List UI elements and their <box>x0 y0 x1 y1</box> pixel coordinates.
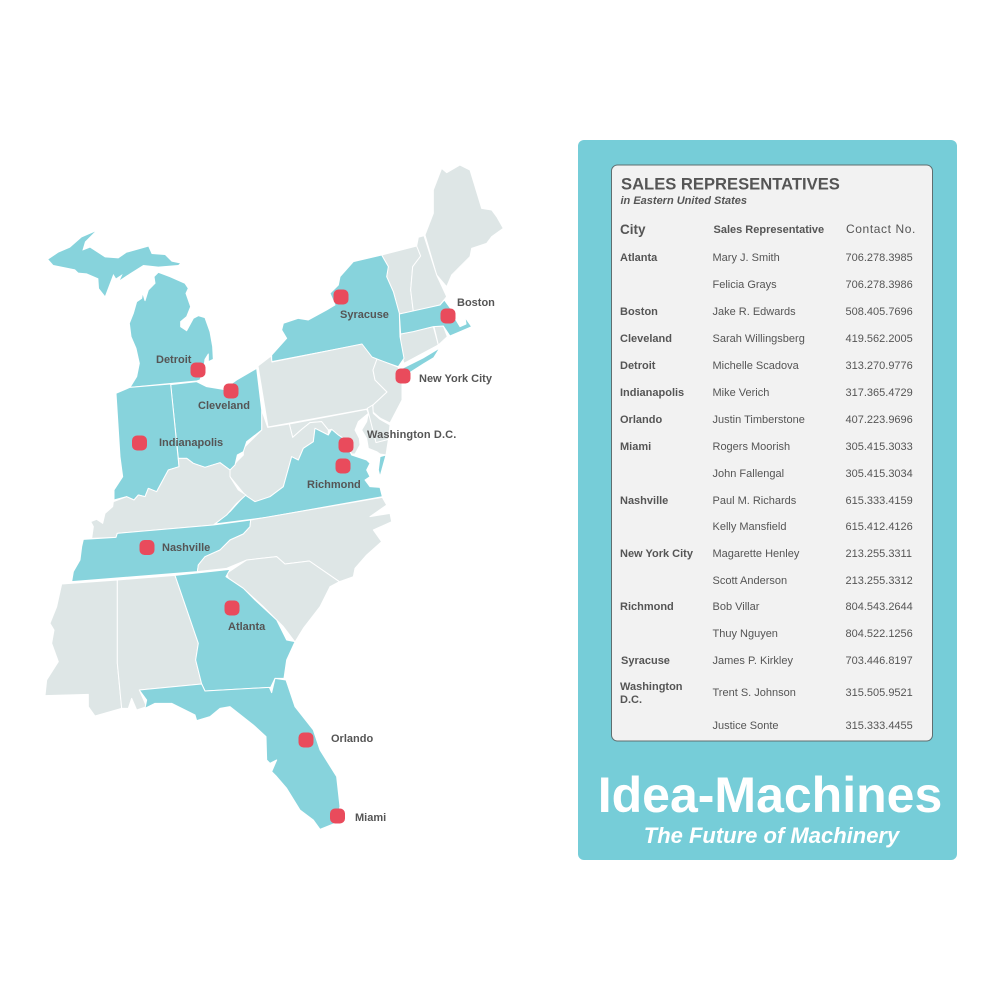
marker: Orlando: Orlando <box>331 733 373 745</box>
row: Syracuse: James P. Kirkley <box>712 655 793 667</box>
row: Nashville: Nashville <box>620 495 668 507</box>
state: South Carolina <box>227 557 339 642</box>
row: Detroit: Michelle Scadova <box>712 360 800 372</box>
row: Atlanta 2 <box>712 279 913 291</box>
tagline: The Future of Machinery <box>644 823 901 848</box>
row: Atlanta: 706.278.3985 <box>846 252 913 264</box>
row: New York City 2: Scott Anderson <box>712 575 787 587</box>
state: Virginia <box>215 428 382 524</box>
row: Washington D.C.: D.C. <box>620 694 642 706</box>
row: Boston: 508.405.7696 <box>846 306 913 318</box>
marker: Miami <box>330 808 386 824</box>
row: Richmond 2 <box>712 628 913 640</box>
marker: Richmond: Richmond <box>307 479 361 491</box>
marker: Indianapolis: Indianapolis <box>159 437 223 449</box>
state: Mississippi <box>45 580 122 716</box>
state: North Carolina <box>197 497 392 582</box>
row: Orlando: Justin Timberstone <box>712 414 805 426</box>
state: New Hampshire <box>411 236 447 312</box>
row: Orlando <box>620 414 913 426</box>
row: Nashville 2 <box>712 521 913 533</box>
row: Indianapolis: Indianapolis <box>620 387 684 399</box>
row: Washington D.C.: 315.505.9521 <box>846 687 913 699</box>
row: Syracuse: Syracuse <box>621 655 670 667</box>
row: Atlanta: Mary J. Smith <box>712 252 780 264</box>
row: Detroit: Detroit <box>620 360 656 372</box>
map: eastern United States <box>45 165 503 829</box>
row: New York City 2 <box>712 575 913 587</box>
state: Alabama <box>117 575 202 710</box>
state: New Jersey <box>373 359 402 423</box>
state: Maine <box>425 165 503 287</box>
row: Orlando: Orlando <box>620 414 662 426</box>
state: Maryland <box>289 409 368 454</box>
row: Nashville: 615.333.4159 <box>846 495 913 507</box>
row: Atlanta <box>620 252 913 264</box>
marker: Richmond <box>307 458 361 491</box>
marker: Atlanta: Atlanta <box>228 621 266 633</box>
row: Richmond 2: 804.522.1256 <box>846 628 913 640</box>
row: Miami: Miami <box>620 441 651 453</box>
row: Atlanta 2: Felicia Grays <box>712 279 777 291</box>
marker: Atlanta <box>224 600 266 633</box>
row: Washington D.C. 2: 315.333.4455 <box>846 720 913 732</box>
state: Michigan upper peninsula <box>48 232 180 296</box>
Long Island <box>395 349 438 382</box>
table rows <box>620 252 913 732</box>
state: Massachusetts <box>399 300 472 336</box>
row: Atlanta: Atlanta <box>620 252 658 264</box>
marker: Nashville: Nashville <box>162 542 210 554</box>
state: Connecticut <box>400 327 438 363</box>
panel: sales representatives <box>578 140 957 860</box>
row: Boston <box>620 306 913 318</box>
row: New York City: 213.255.3311 <box>846 548 912 560</box>
table card <box>612 165 932 741</box>
row: Orlando: 407.223.9696 <box>846 414 913 426</box>
marker: Detroit <box>156 354 206 378</box>
row: Washington D.C. <box>620 681 913 706</box>
row: Cleveland: Cleveland <box>620 333 672 345</box>
column headers: City <box>620 222 646 237</box>
state: West Virginia <box>230 410 328 502</box>
state: Ohio <box>171 368 262 470</box>
row: Washington D.C. 2 <box>712 720 913 732</box>
row: Miami 2: John Fallengal <box>712 468 784 480</box>
state: Rhode Island <box>434 326 447 345</box>
marker: Orlando <box>298 732 373 748</box>
row: Nashville 2: 615.412.4126 <box>846 521 913 533</box>
column headers: Contact No. <box>846 222 916 236</box>
row: Miami <box>620 441 913 453</box>
marker: Cleveland <box>198 384 250 412</box>
row: Cleveland <box>620 333 913 345</box>
row: Washington D.C.: Washington <box>620 681 683 693</box>
marker: Indianapolis <box>132 436 223 450</box>
row: New York City <box>620 548 912 560</box>
marker: Washington D.C. <box>338 429 456 452</box>
row: Detroit: 313.270.9776 <box>846 360 913 372</box>
row: Syracuse <box>621 655 913 667</box>
row: Atlanta 2: 706.278.3986 <box>846 279 913 291</box>
row: Miami 2 <box>712 468 913 480</box>
marker: New York City <box>396 368 493 385</box>
row: Syracuse: 703.446.8197 <box>846 655 913 667</box>
marker: Boston: Boston <box>457 297 495 309</box>
row: Washington D.C. 2: Justice Sonte <box>712 720 779 732</box>
row: New York City 2: 213.255.3312 <box>846 575 913 587</box>
row: Cleveland: Sarah Willingsberg <box>712 333 805 345</box>
row: Richmond: 804.543.2644 <box>846 601 913 613</box>
table heading: SALES REPRESENTATIVES <box>621 174 840 194</box>
row: Cleveland: 419.562.2005 <box>846 333 913 345</box>
state: Tennessee <box>72 520 251 582</box>
row: Indianapolis: Mike Verich <box>712 387 769 399</box>
company name: Idea-Machines <box>598 767 942 823</box>
marker: Detroit: Detroit <box>156 354 192 366</box>
row: Richmond: Richmond <box>620 601 674 613</box>
row: Nashville: Paul M. Richards <box>712 495 797 507</box>
marker: Syracuse: Syracuse <box>340 309 389 321</box>
row: Richmond 2: Thuy Nguyen <box>712 628 778 640</box>
row: Detroit <box>620 360 913 372</box>
marker: Boston <box>440 297 495 324</box>
row: Miami: 305.415.3033 <box>846 441 913 453</box>
row: New York City: Magarette Henley <box>712 548 800 560</box>
marker: Washington D.C.: Washington D.C. <box>367 429 456 441</box>
row: Richmond: Bob Villar <box>712 601 760 613</box>
row: Miami 2: 305.415.3034 <box>846 468 913 480</box>
state: Kentucky <box>91 458 246 538</box>
row: Miami: Rogers Moorish <box>712 441 790 453</box>
Virginia eastern shore <box>378 455 386 477</box>
panel background <box>578 140 957 860</box>
state: Pennsylvania <box>258 344 387 427</box>
marker: Cleveland: Cleveland <box>198 400 250 412</box>
table subheading: in Eastern United States <box>620 195 747 207</box>
row: Washington D.C.: Trent S. Johnson <box>712 687 796 699</box>
row: Boston: Boston <box>620 306 658 318</box>
state: New York <box>272 255 404 367</box>
row: Nashville <box>620 495 913 507</box>
row: Indianapolis <box>620 387 913 399</box>
marker: Syracuse <box>334 290 389 321</box>
state: Delaware and eastern Maryland <box>362 405 390 455</box>
row: Richmond <box>620 601 913 613</box>
city markers and labels <box>132 290 495 824</box>
state: Michigan lower peninsula <box>129 272 213 387</box>
row: Boston: Jake R. Edwards <box>712 306 796 318</box>
marker: Nashville <box>140 540 210 555</box>
marker: New York City: New York City <box>419 373 493 385</box>
state: Georgia <box>175 569 295 691</box>
row: Nashville 2: Kelly Mansfield <box>712 521 786 533</box>
state: Florida <box>139 678 340 829</box>
marker: Miami: Miami <box>355 812 386 824</box>
row: Indianapolis: 317.365.4729 <box>846 387 913 399</box>
state: Indiana <box>114 384 179 500</box>
column headers: Sales Representative <box>714 224 824 236</box>
row: New York City: New York City <box>620 548 694 560</box>
state: Vermont <box>382 246 421 314</box>
column headers <box>620 222 916 237</box>
